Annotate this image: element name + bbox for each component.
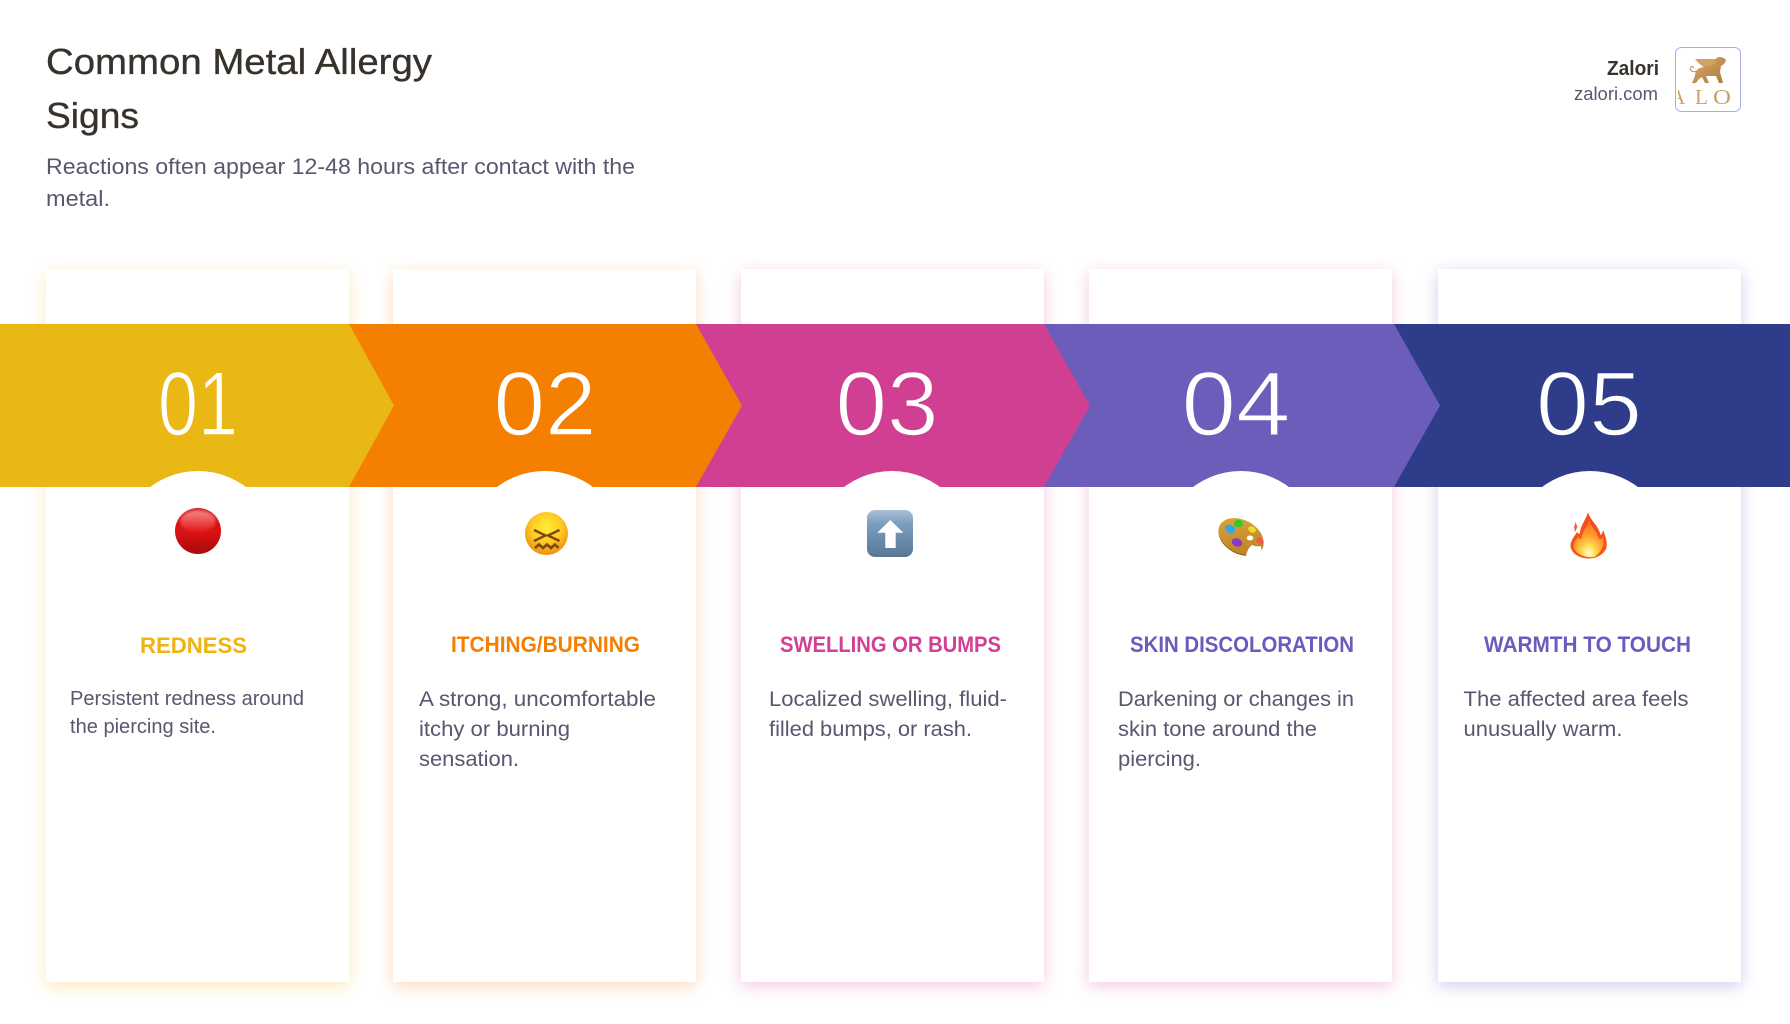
- card 3 text: [769, 632, 1007, 741]
- logo letters: O: [1713, 85, 1731, 109]
- brand name and url: [1574, 58, 1659, 104]
- heading: itching: ITCHING/BURNING: [451, 632, 640, 657]
- white notch 3: [812, 471, 972, 631]
- description: itching: itchy or burning: [419, 718, 570, 741]
- description: swelling: Localized swelling, fluid-: [769, 688, 1007, 711]
- description: itching: [419, 688, 656, 771]
- icon: winged lion: [1690, 57, 1726, 83]
- arrow band 2: [340, 324, 742, 487]
- panel: card 1 shadow and body: [46, 269, 349, 986]
- arrow band 3: [690, 324, 1090, 487]
- logo letters: A: [1671, 85, 1686, 109]
- heading: discoloration: SKIN DISCOLORATION: [1130, 632, 1354, 657]
- description: discoloration: piercing.: [1118, 748, 1201, 771]
- subtitle: metal.: [46, 186, 110, 211]
- card 5 text: [1464, 632, 1691, 741]
- title: [46, 41, 432, 136]
- heading: swelling: SWELLING OR BUMPS: [780, 632, 1001, 657]
- number 05: 05: [1536, 354, 1642, 455]
- description: warmth: [1464, 688, 1688, 741]
- white notch 1: [118, 471, 278, 631]
- heading: redness: REDNESS: [140, 633, 247, 658]
- description: redness: [70, 688, 304, 738]
- subtitle: [46, 154, 635, 211]
- description: itching: sensation.: [419, 748, 519, 771]
- arrow band 4: [1040, 324, 1440, 487]
- number 02: 02: [494, 354, 596, 455]
- arrow band 1: [0, 324, 394, 487]
- panel: card 5 shadow and body: [1438, 269, 1741, 986]
- description: redness: Persistent redness around: [70, 688, 304, 710]
- description: warmth: The affected area feels: [1464, 688, 1688, 711]
- brand name and url: Zalori: [1607, 58, 1659, 80]
- white notch 2: [465, 471, 625, 631]
- logo: [1671, 48, 1740, 112]
- heading: warmth: WARMTH TO TOUCH: [1484, 632, 1691, 657]
- logo letters: [1678, 90, 1730, 104]
- icon: up arrow button: [867, 510, 913, 557]
- title: Signs: [46, 95, 139, 136]
- number 04: 04: [1182, 354, 1290, 455]
- icon: artist palette: [1212, 511, 1270, 563]
- card 1 text: [70, 633, 304, 738]
- white notch 5: [1510, 471, 1670, 631]
- brand name and url: zalori.com: [1574, 84, 1658, 104]
- description: discoloration: skin tone around the: [1118, 718, 1317, 741]
- white notch 4: [1161, 471, 1321, 631]
- icon: red circle: [175, 508, 221, 554]
- panel: card 3 shadow and body: [741, 269, 1044, 986]
- description: swelling: filled bumps, or rash.: [769, 718, 972, 741]
- arrow band 5: [1394, 324, 1790, 487]
- number 03: 03: [836, 354, 938, 455]
- description: swelling: [769, 688, 1007, 741]
- description: discoloration: [1118, 688, 1354, 771]
- description: warmth: unusually warm.: [1464, 718, 1622, 741]
- icon: confounded face: [525, 512, 568, 555]
- icon: fire: [1570, 512, 1607, 558]
- number 01: 01: [158, 354, 238, 455]
- description: discoloration: Darkening or changes in: [1118, 688, 1354, 711]
- card 4 text: [1118, 632, 1354, 771]
- description: itching: A strong, uncomfortable: [419, 688, 656, 711]
- card 2 text: [419, 632, 656, 771]
- title: Common Metal Allergy: [46, 41, 432, 82]
- description: redness: the piercing site.: [70, 716, 216, 738]
- panel: card 4 shadow and body: [1089, 269, 1392, 986]
- subtitle: Reactions often appear 12-48 hours after contact with the: [46, 154, 635, 179]
- panel: card 2 shadow and body: [393, 269, 696, 986]
- logo letters: L: [1695, 85, 1708, 109]
